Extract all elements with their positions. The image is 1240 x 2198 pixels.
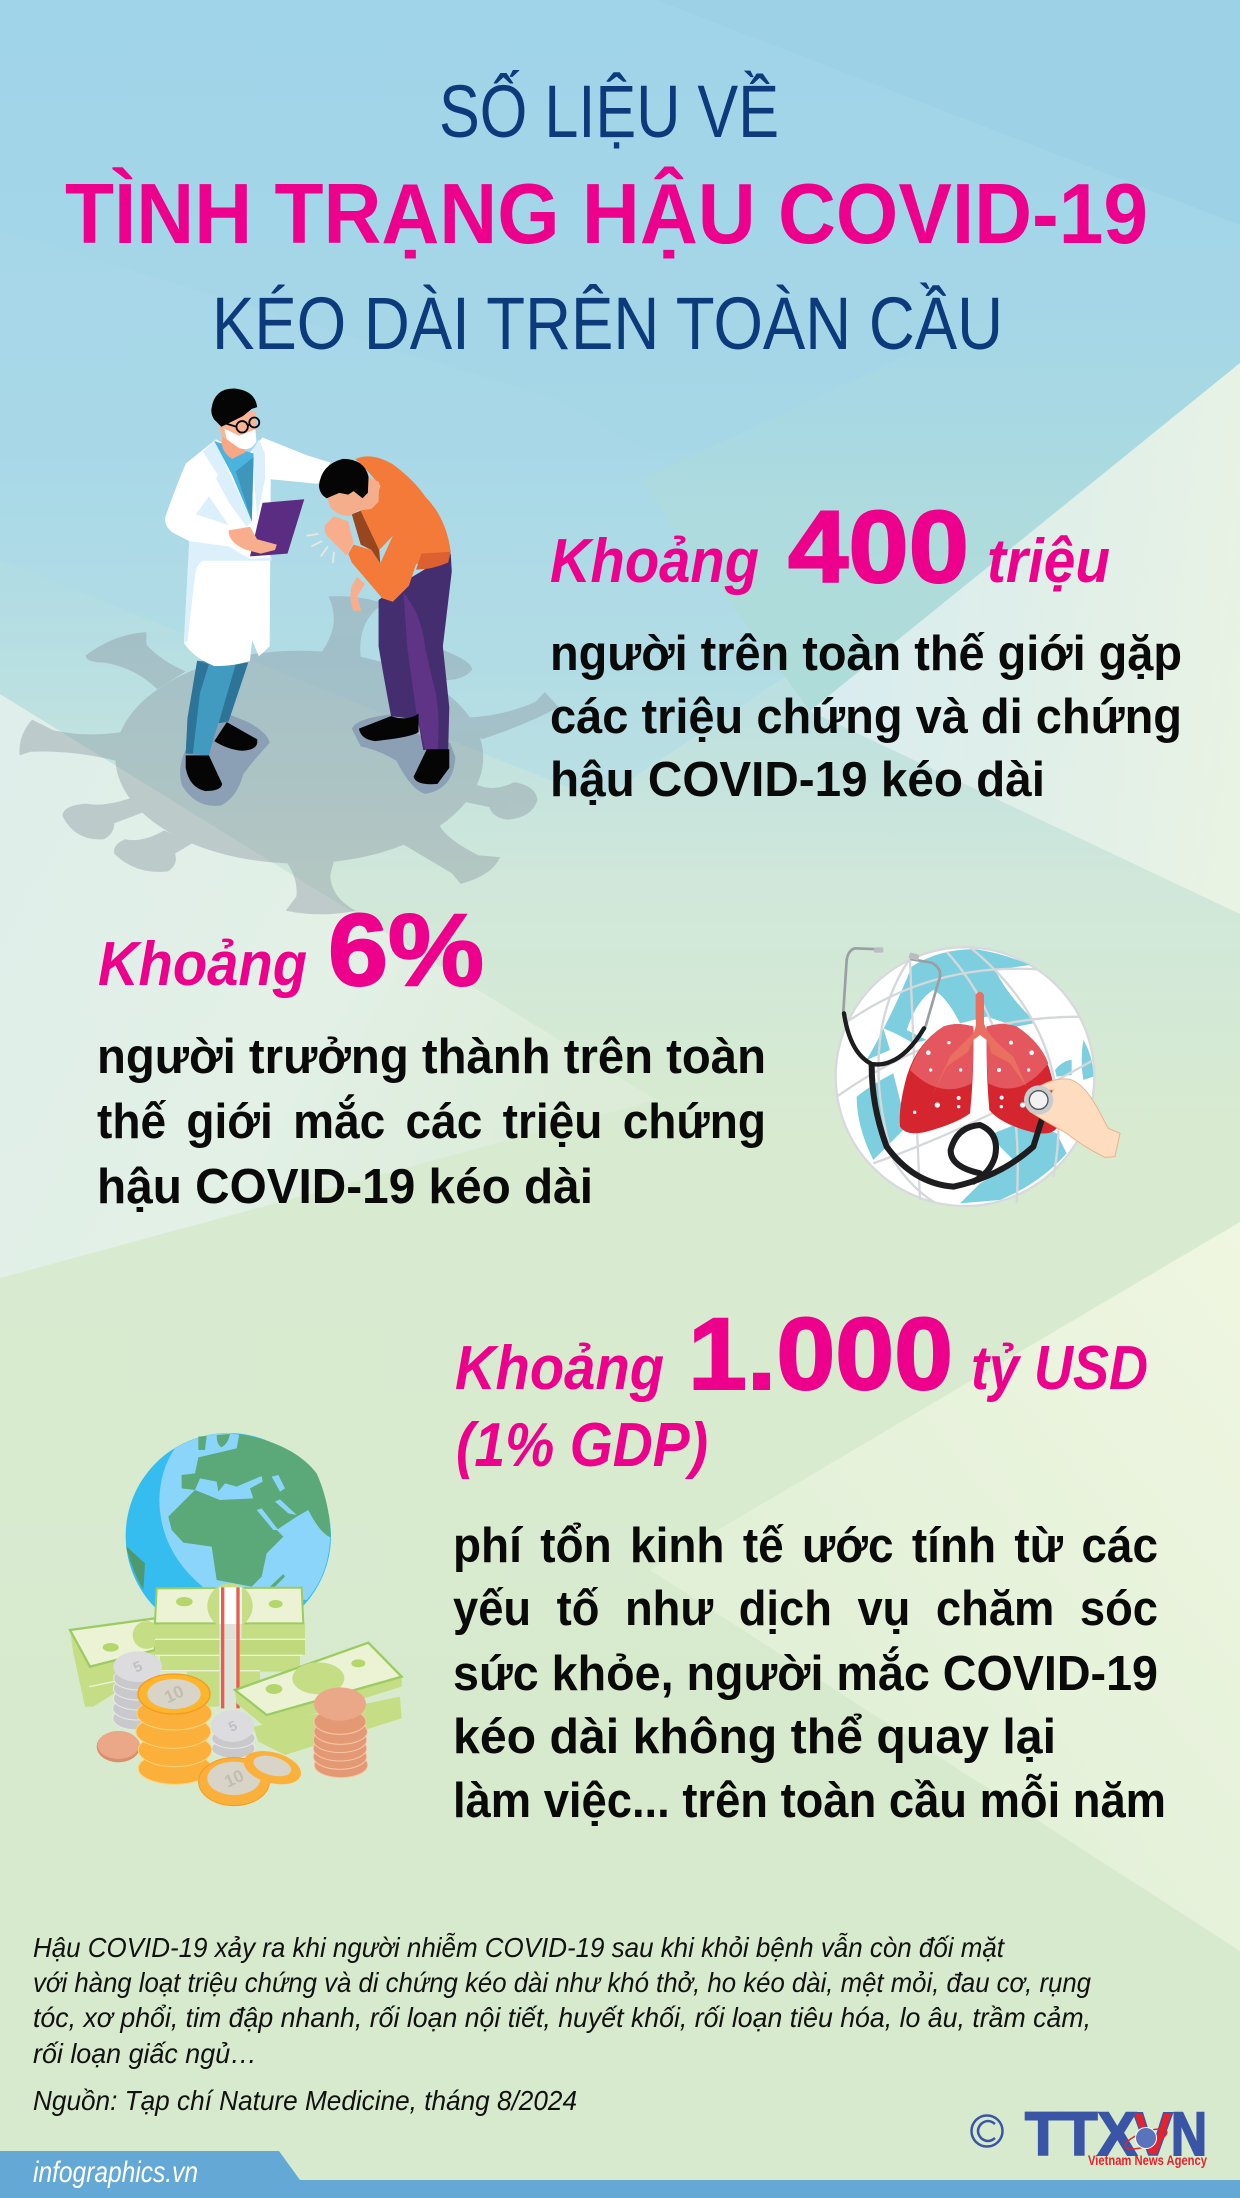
stat 1 description: các triệu chứng và di chứng: [550, 690, 1182, 744]
stat 3 description: phí tổn kinh tế ước tính từ các: [453, 1519, 1158, 1573]
hand with chest piece: [1024, 1079, 1120, 1157]
stat 1 figure: 400: [788, 490, 969, 604]
stethoscope ear tips: [874, 947, 920, 961]
logo letters: TTX: [1025, 2100, 1137, 2168]
bills stack left: [70, 1618, 161, 1707]
footnote: rối loạn giấc ngủ…: [33, 2038, 257, 2069]
stat 1 description: [550, 627, 1182, 807]
source: Nguồn: Tạp chí Nature Medicine, tháng 8/2024: [33, 2085, 577, 2116]
footnote: với hàng loạt triệu chứng và di chứng kéo dài như khó thở, ho kéo dài, mệt mỏi, đau cơ, rụng: [33, 1967, 1091, 1998]
stat 2 description: người trưởng thành trên toàn: [97, 1030, 766, 1084]
footer site name: infographics.vn: [33, 2156, 198, 2189]
stat 2 description: hậu COVID-19 kéo dài: [97, 1160, 593, 1214]
stat 2: 6 percent: [97, 893, 766, 1214]
silver coin stacks: [113, 1651, 255, 1758]
doctor: [165, 389, 330, 791]
lungs: [900, 992, 1057, 1134]
title: [65, 70, 1148, 365]
logo globe: [1123, 2125, 1169, 2153]
stat 1 figure: triệu: [987, 527, 1110, 596]
shoe shadows: [180, 714, 455, 806]
footer bar: [0, 2151, 1240, 2198]
stat 3 figure: (1% GDP): [456, 1411, 708, 1480]
bills stack center: [155, 1583, 305, 1708]
stat 1 description: hậu COVID-19 kéo dài: [550, 753, 1045, 807]
globe: [836, 947, 1094, 1206]
stat 2 description: [97, 1030, 766, 1214]
title line 3: KÉO DÀI TRÊN TOÀN CẦU: [212, 282, 1003, 365]
stat 3 description: yếu tố như dịch vụ chăm sóc: [453, 1582, 1158, 1636]
virus shadow: [19, 596, 559, 914]
title line 2: TÌNH TRẠNG HẬU COVID-19: [65, 166, 1148, 262]
stat 2 figure: 6%: [328, 893, 484, 1007]
logo letters: V: [1133, 2100, 1173, 2168]
footnote: [33, 1932, 1091, 2069]
copyright symbol: [972, 2116, 1002, 2146]
stethoscope: [843, 948, 1042, 1187]
stat 3 description: kéo dài không thể quay lại: [453, 1710, 1056, 1764]
footnote: Hậu COVID-19 xảy ra khi người nhiễm COVID-19 sau khi khỏi bệnh vẫn còn đối mặt: [33, 1932, 1005, 1963]
stat 3 description: làm việc... trên toàn cầu mỗi năm: [453, 1774, 1166, 1828]
footnote: tóc, xơ phổi, tim đập nhanh, rối loạn nội tiết, huyết khối, rối loạn tiêu hóa, lo âu, trầm cảm,: [33, 2002, 1091, 2033]
stat 3 figure: 1.000: [688, 1297, 953, 1411]
illustration: globe with money and coins: [70, 1433, 402, 1806]
stat 1 figure: Khoảng: [550, 527, 759, 596]
stat 1: 400 million: [550, 490, 1182, 807]
stat 3 figure: [455, 1297, 1148, 1480]
patient: [306, 456, 452, 784]
stat 2 description: thế giới mắc các triệu chứng: [97, 1094, 766, 1149]
copper coins: [97, 1687, 368, 1778]
gold coin stacks: 10: [161, 1681, 187, 1707]
silver coin stacks: 5: [131, 1659, 145, 1677]
title line 1: SỐ LIỆU VỀ: [439, 70, 779, 153]
illustration: globe, lungs and stethoscope: [836, 947, 1120, 1206]
gold coin stacks: 10: [221, 1765, 247, 1791]
stat 3 figure: Khoảng: [455, 1334, 664, 1403]
stat 3 description: [453, 1519, 1166, 1828]
stat 2 figure: [98, 893, 484, 1007]
bills stack right: [235, 1642, 402, 1755]
logo tagline: Vietnam News Agency: [1088, 2152, 1207, 2168]
logo letters: N: [1171, 2100, 1207, 2168]
stat 2 figure: Khoảng: [98, 930, 307, 999]
gold coin stacks: [136, 1674, 305, 1806]
stat 3 description: sức khỏe, người mắc COVID-19: [453, 1646, 1158, 1701]
logo letters: [1025, 2100, 1207, 2168]
stat 3 figure: tỷ USD: [971, 1334, 1148, 1403]
stat 1 description: người trên toàn thế giới gặp: [550, 627, 1182, 681]
stat 3: 1000 billion USD: [453, 1297, 1166, 1828]
earth: [126, 1433, 331, 1638]
illustration: doctor and coughing patient on virus shadow: [19, 389, 559, 914]
logo: TTXVN: [972, 2100, 1207, 2168]
silver coin stacks: 5: [226, 1717, 240, 1735]
stat 1 figure: [550, 490, 1110, 604]
